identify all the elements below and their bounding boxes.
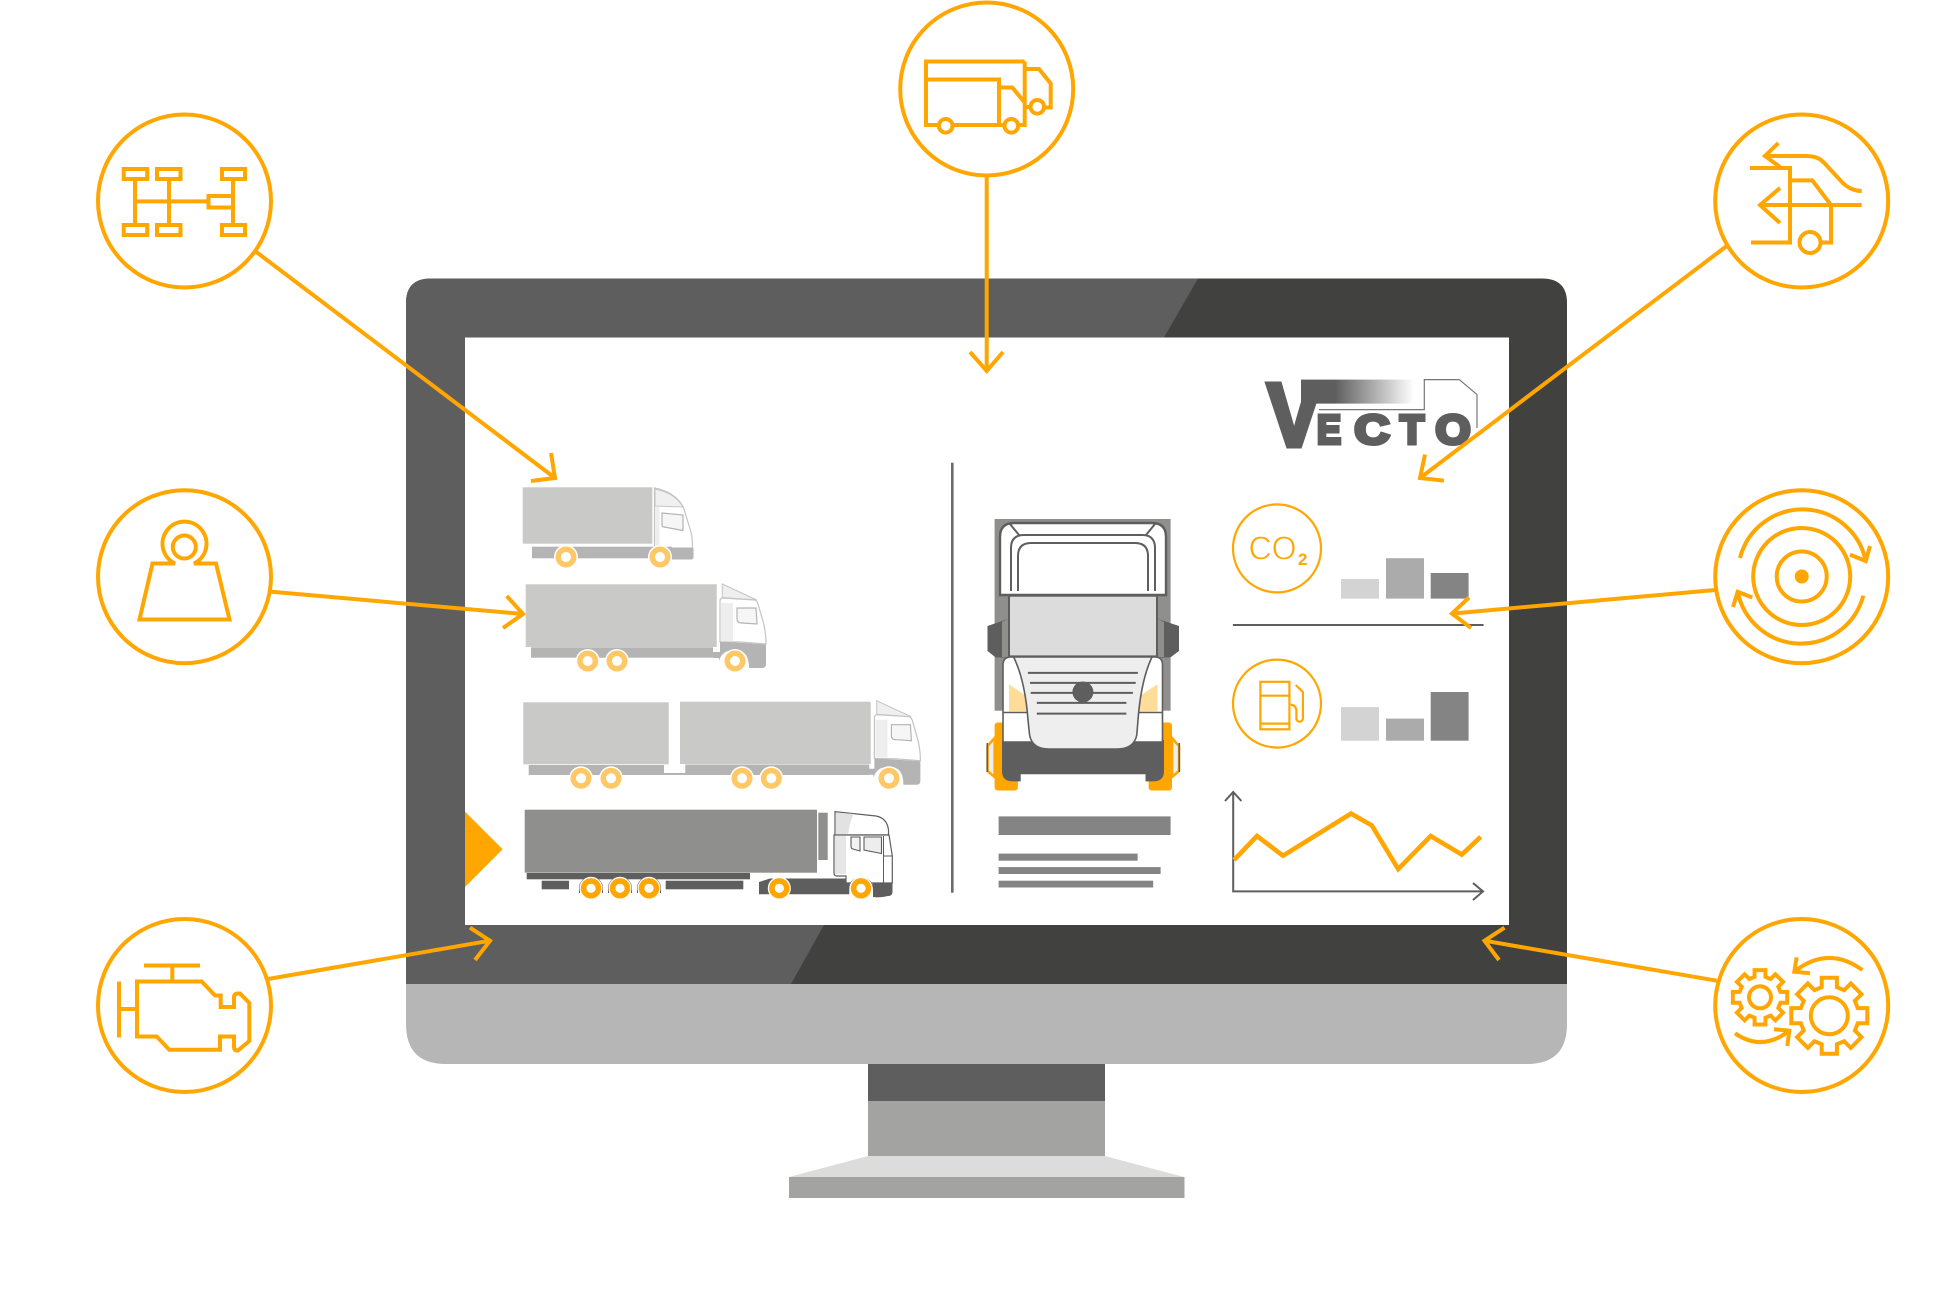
truck windshield panel (1009, 596, 1157, 656)
arrow: truck to screen (970, 176, 1003, 371)
truck mirrors (988, 619, 1179, 658)
icon circle: chassis (98, 114, 271, 288)
icon circle: trucks (900, 2, 1073, 176)
monitor stand (789, 1064, 1184, 1198)
bar chart: CO2 (1341, 558, 1469, 599)
truck bumper (1002, 740, 1164, 781)
panel: CO2 result (1233, 504, 1469, 599)
monitor bezel (406, 278, 1567, 984)
icon: CO2: CO (1248, 530, 1296, 566)
arrow: engine to screen (268, 928, 490, 979)
icon circle: tyre (1715, 490, 1888, 663)
text placeholder bars (999, 816, 1171, 888)
logo: VECTO (1267, 365, 1477, 466)
icon circle: weight (98, 490, 271, 663)
icon: fuel pump (1233, 660, 1321, 748)
truck cab top (1000, 523, 1166, 595)
arrow: gearbox to screen (1484, 928, 1717, 981)
truck 4 selected tractor trailer (525, 810, 892, 900)
icon circle: gearbox (1715, 919, 1888, 1092)
logo: VECTO: O (1436, 406, 1470, 452)
truck 2 rigid tandem (526, 584, 766, 673)
monitor chin (406, 984, 1567, 1064)
arrow: tyres to results (1452, 590, 1715, 628)
arrow: weight to trucks (272, 592, 523, 628)
selection marker (465, 812, 503, 887)
truck wheels (986, 722, 1180, 790)
arrow: chassis to trucks (255, 251, 555, 481)
truck 3 road train (523, 701, 920, 790)
icon: CO2 (1233, 504, 1321, 592)
truck 1 rigid (523, 487, 694, 569)
panel: truck front view (986, 519, 1180, 888)
icon: CO2: 2 (1298, 550, 1307, 569)
monitor screen (465, 338, 1509, 925)
logo: VECTO: T (1400, 406, 1424, 452)
panel: fuel result (1233, 660, 1469, 748)
icon circle: engine (98, 919, 271, 1092)
bar chart: fuel (1341, 692, 1469, 741)
truck front body (1003, 657, 1162, 749)
truck back (995, 519, 1171, 711)
line chart (1225, 792, 1483, 900)
icon circle: driving cycle and aerodynamics (1715, 114, 1888, 288)
logo: VECTO: E (1317, 406, 1341, 452)
arrow: driving cycle to results (1420, 246, 1727, 481)
panel: truck list (465, 487, 920, 900)
logo: VECTO: C (1354, 406, 1390, 452)
monitor (406, 278, 1567, 1198)
logo: VECTO: V (1267, 365, 1321, 466)
